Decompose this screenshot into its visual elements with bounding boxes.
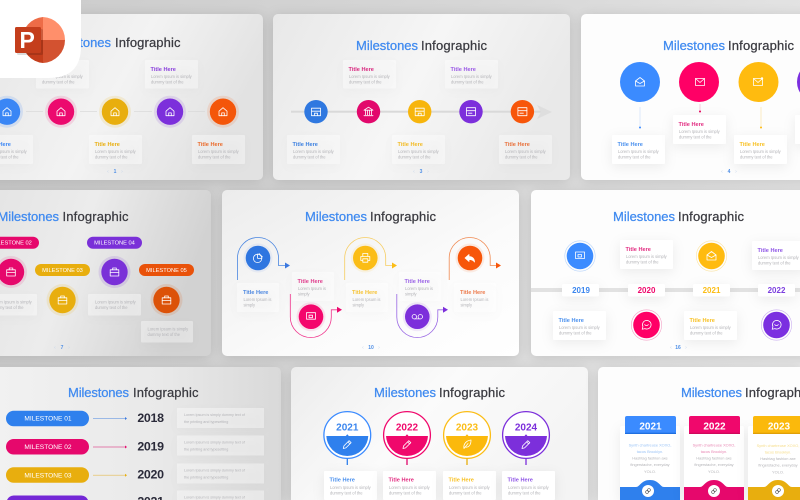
card purple: dummy text of the <box>151 80 184 84</box>
card orange: Title Here <box>198 142 223 148</box>
column 2021: fingerstache, everyday <box>630 462 670 467</box>
heading: milestone rows: Milestones <box>68 385 130 400</box>
node yellow <box>46 284 78 316</box>
milestone circle orange <box>207 96 239 128</box>
card pink: Title Here <box>626 247 651 253</box>
page number: ‹ <box>670 345 672 351</box>
year 2022: 2022 <box>768 286 786 295</box>
year 2020 <box>628 284 665 296</box>
curved arrow blue <box>238 237 290 280</box>
curved arrow yellow <box>345 237 397 280</box>
card blue: dummy text of the <box>293 154 326 160</box>
card yellow: Title Here <box>740 142 765 148</box>
column 2021: Synth chartreuse XOXO, <box>629 442 671 448</box>
card pink: Title Here <box>298 279 323 285</box>
gauge 2024 <box>503 412 549 465</box>
curved arrow orange <box>449 237 501 280</box>
pill milestone 03: MILESTONE 03 <box>42 268 83 274</box>
card purple: Title Here <box>508 478 533 484</box>
column 2023: fingerstache, everyday <box>758 462 798 468</box>
page number: ‹ <box>721 169 723 175</box>
milestone circle blue <box>0 96 23 128</box>
gauge 2024: 2024 <box>515 422 538 434</box>
text block right: dummy text of the <box>148 332 181 337</box>
card pink <box>620 240 673 269</box>
row 2019: Lorem Ipsum is simply dummy text of <box>184 440 246 444</box>
pill milestone 02 <box>0 237 39 249</box>
column 2021: 2021 <box>639 422 662 432</box>
column 2021: YOLO. <box>644 469 656 474</box>
row 2020: the printing and typesetting <box>184 476 228 480</box>
card yellow: Title Here <box>94 142 120 148</box>
node blue <box>244 244 272 272</box>
year 2020: 2020 <box>638 286 656 295</box>
row 2018 <box>6 408 264 428</box>
panel: year columns <box>598 367 800 500</box>
card purple: Title Here <box>450 67 476 73</box>
text block right: Lorem Ipsum is simply <box>148 326 189 332</box>
gauge 2022 <box>384 412 430 465</box>
card pink: Lorem Ipsum is simply <box>349 74 391 79</box>
card pink: Lorem Ipsum is simply <box>679 129 721 134</box>
node pink <box>0 256 27 288</box>
card blue: dummy text of the <box>330 490 363 496</box>
panel: slide 3 line timeline <box>273 14 570 180</box>
pill milestone 04 <box>87 237 142 249</box>
card yellow <box>346 283 388 312</box>
card yellow: Title Here <box>690 318 715 324</box>
card pink: Title Here <box>42 67 67 73</box>
card pink: Lorem Ipsum is simply <box>42 74 84 79</box>
node yellow <box>696 241 727 271</box>
year 2019: 2019 <box>572 286 590 295</box>
card blue <box>287 135 340 164</box>
card pink: simply <box>298 292 311 296</box>
row 2018: the printing and typesetting <box>184 420 228 424</box>
text block left <box>0 294 37 316</box>
heading: slide 3: Milestones <box>356 38 418 53</box>
card pink: dummy text of the <box>389 490 422 496</box>
milestone circle yellow <box>99 96 131 128</box>
column 2021: tacos Brooklyn. <box>637 449 663 454</box>
card yellow: dummy text of the <box>690 330 723 336</box>
heading: milestone rows: Infographic <box>133 385 199 400</box>
gauge 2023: 2023 <box>456 422 479 434</box>
card purple: Lorem Ipsum is <box>405 286 433 291</box>
row 2020 <box>6 464 264 484</box>
page number: ‹ <box>107 169 109 175</box>
page number <box>413 169 429 175</box>
page number: 7 <box>61 345 64 351</box>
card blue: Lorem Ipsum is simply <box>293 149 335 154</box>
card blue: dummy text of the <box>618 154 651 160</box>
heading: year gauges: Milestones <box>374 385 436 400</box>
row 2018: Lorem Ipsum is simply dummy text of <box>184 413 246 417</box>
page number <box>362 345 380 351</box>
year 2019 <box>562 284 599 296</box>
column 2023: Synth chartreuse XOXO, <box>757 443 799 448</box>
card blue <box>324 471 377 500</box>
column 2022: YOLO. <box>708 469 720 474</box>
card blue <box>612 135 665 164</box>
panel: slide 16 year timeline <box>531 190 800 356</box>
card purple <box>445 60 498 88</box>
card yellow: Lorem Ipsum is <box>352 297 380 302</box>
heading: slide 1: Infographic <box>115 35 181 50</box>
card pink: Title Here <box>678 122 704 128</box>
card pink <box>343 60 396 88</box>
card purple: dummy text of the <box>451 80 484 84</box>
PowerPoint logo panel <box>0 0 81 78</box>
row 2019: 2019 <box>137 440 164 454</box>
card purple: dummy text of the <box>758 260 791 266</box>
card purple <box>145 60 198 88</box>
card orange: Title Here <box>460 290 485 296</box>
node blue <box>304 100 328 123</box>
card blue <box>553 311 606 340</box>
year 2021 <box>693 284 730 296</box>
card orange: Lorem Ipsum is simply <box>505 149 547 154</box>
card pink: Lorem Ipsum is simply <box>626 254 668 259</box>
connector lines <box>26 111 205 113</box>
heading: year columns: Milestones <box>681 385 742 400</box>
page number: 10 <box>368 345 374 351</box>
pill milestone 04: MILESTONE 04 <box>94 241 135 247</box>
card blue: Title Here <box>558 318 584 324</box>
year 2022 <box>758 284 795 296</box>
card blue: Title Here <box>292 142 318 148</box>
card blue: Lorem Ipsum is <box>244 297 271 302</box>
row 2021: Lorem Ipsum is simply dummy text of <box>184 496 246 500</box>
heading: slide 10: Milestones <box>305 209 368 224</box>
panel: milestone rows <box>0 367 281 500</box>
column 2022: Hashtag fashion axe <box>696 456 732 460</box>
page number: 4 <box>728 169 731 175</box>
card yellow: Lorem Ipsum is simply <box>95 149 137 154</box>
card pink <box>673 115 726 144</box>
pill milestone 03 <box>35 264 90 276</box>
card purple <box>399 272 441 301</box>
card orange: Lorem Ipsum is simply <box>198 149 240 154</box>
card purple: dummy text of the <box>508 490 541 496</box>
panel: slide 4 large circles <box>581 14 800 180</box>
row 2019: the printing and typesetting <box>184 448 228 452</box>
card yellow <box>734 135 787 164</box>
card yellow <box>392 135 445 164</box>
card purple edge <box>795 115 800 144</box>
timeline bar <box>531 288 800 292</box>
heading: slide 16: Infographic <box>678 209 744 224</box>
text block right <box>141 321 193 342</box>
column 2023: 2023 <box>768 422 791 432</box>
card yellow: Title Here <box>448 478 474 484</box>
card pink: dummy text of the <box>42 80 75 84</box>
node orange <box>456 244 484 272</box>
heading: slide 3: Infographic <box>421 38 488 53</box>
pill milestone 05: MILESTONE 05 <box>146 268 187 274</box>
node purple <box>98 256 130 288</box>
gauge 2022: 2022 <box>396 422 419 434</box>
card pink: dummy text of the <box>626 260 659 264</box>
card orange: Title Here <box>504 142 530 148</box>
card orange: dummy text of the <box>505 154 538 160</box>
text block middle: dummy text of the <box>95 305 128 310</box>
gauge 2023 <box>444 412 490 465</box>
card yellow: Lorem Ipsum is simply <box>740 149 782 154</box>
node orange <box>150 284 182 316</box>
curved arrow purple <box>397 294 448 337</box>
column 2022: fingerstache, everyday <box>694 462 734 467</box>
year 2021: 2021 <box>703 286 721 295</box>
card purple <box>752 241 800 270</box>
card pink: dummy text of the <box>679 134 712 140</box>
row 2019 <box>6 436 264 456</box>
card blue: Lorem Ipsum is simply <box>618 149 660 154</box>
card purple <box>502 471 555 500</box>
card pink: Title Here <box>388 478 414 484</box>
gauge 2021 <box>324 412 371 465</box>
card blue: Title Here <box>243 290 268 296</box>
page number: › <box>685 345 687 351</box>
icon: PowerPoint logo: P <box>20 27 35 53</box>
card blue: Lorem Ipsum is simply <box>330 485 372 490</box>
page number: › <box>121 169 123 175</box>
node pink with stem <box>679 62 719 112</box>
card purple: Title Here <box>404 279 430 285</box>
column 2022: tacos Brooklyn. <box>701 449 727 454</box>
card yellow: Lorem Ipsum is simply <box>690 325 732 330</box>
node pink <box>296 302 326 331</box>
column 2022: Synth chartreuse XOXO, <box>693 442 735 448</box>
page number: › <box>68 345 70 351</box>
card yellow: Lorem Ipsum is simply <box>449 485 491 490</box>
card pink: dummy text of the <box>349 80 382 84</box>
card yellow: dummy text of the <box>398 154 431 160</box>
page number: ‹ <box>413 169 415 175</box>
heading: slide 16: Milestones <box>613 209 676 224</box>
card orange <box>499 135 552 164</box>
heading: slide 10: Infographic <box>370 209 436 224</box>
page number: ‹ <box>362 345 364 351</box>
node purple <box>797 62 800 102</box>
card yellow: simply <box>352 302 365 308</box>
card purple: Lorem Ipsum is simply <box>451 74 493 79</box>
row 2018: MILESTONE 01 <box>24 416 72 423</box>
column 2023 <box>748 416 800 500</box>
card yellow <box>684 311 737 340</box>
panel: slide 1 circles timeline <box>0 14 263 180</box>
node purple <box>459 100 483 123</box>
node purple <box>403 302 432 331</box>
column 2021: Hashtag fashion axe <box>632 456 668 460</box>
card blue <box>0 135 33 164</box>
node pink <box>357 100 380 123</box>
pill milestone 05 <box>139 264 194 276</box>
column 2023: Hashtag fashion axe <box>760 456 796 461</box>
heading: slide 7: Infographic <box>62 209 129 224</box>
column 2022: 2022 <box>703 422 726 432</box>
card yellow <box>89 135 142 164</box>
card yellow: dummy text of the <box>740 154 773 160</box>
row 2019: MILESTONE 02 <box>24 444 72 451</box>
card blue: dummy text of the <box>559 330 592 336</box>
page number <box>107 169 123 175</box>
card blue: simply <box>244 302 256 308</box>
text block middle <box>88 294 141 316</box>
curved arrow pink <box>290 294 342 337</box>
card pink <box>292 272 334 301</box>
panel: slide 10 curved arrows <box>222 190 519 356</box>
column 2021 <box>620 416 680 500</box>
node blue with stem <box>620 62 660 128</box>
node purple <box>761 310 792 340</box>
page number: › <box>378 345 380 351</box>
heading: slide 1: Milestones <box>49 35 112 50</box>
node yellow with stem <box>738 62 778 128</box>
gauge 2021: 2021 <box>336 422 359 434</box>
heading: slide 4: Infographic <box>728 38 794 53</box>
card yellow: dummy text of the <box>449 490 482 496</box>
node yellow <box>408 100 431 123</box>
text block middle: Lorem Ipsum is simply <box>95 300 137 304</box>
card orange <box>454 283 496 312</box>
card orange <box>192 135 245 164</box>
card pink: Title Here <box>348 67 374 73</box>
card pink <box>383 471 436 500</box>
card orange: simply <box>460 302 473 308</box>
card purple: Title Here <box>758 248 783 254</box>
milestone circle purple <box>154 96 186 128</box>
card yellow: Title Here <box>352 290 377 296</box>
card purple: Lorem Ipsum is simply <box>151 74 193 79</box>
page number: 16 <box>675 345 681 351</box>
card yellow: Title Here <box>398 142 423 148</box>
node pink <box>631 310 662 340</box>
panel: year gauges <box>291 367 588 500</box>
card purple: Title Here <box>150 67 176 73</box>
card blue: Lorem Ipsum is simply <box>559 325 601 330</box>
card purple: Lorem Ipsum is simply <box>508 485 550 490</box>
column 2023: YOLO. <box>772 470 784 474</box>
row 2020: 2020 <box>137 468 164 482</box>
heading: slide 4: Milestones <box>663 38 726 53</box>
milestone circle pink <box>45 96 77 128</box>
column 2023: tacos Brooklyn. <box>765 450 791 454</box>
page number <box>721 169 737 175</box>
card blue: Title Here <box>618 142 643 148</box>
row 2020: Lorem Ipsum is simply dummy text of <box>184 468 246 472</box>
heading: year gauges: Infographic <box>439 385 506 400</box>
row 2020: MILESTONE 03 <box>24 472 72 480</box>
card yellow: dummy text of the <box>95 154 128 160</box>
row 2018: 2018 <box>137 411 164 425</box>
card pink <box>36 60 89 88</box>
card pink: Lorem Ipsum is simply <box>389 485 431 490</box>
card yellow <box>443 471 496 500</box>
node blue <box>565 241 595 271</box>
card blue <box>237 283 279 312</box>
timeline arrow <box>291 105 552 119</box>
page number: › <box>427 169 429 175</box>
card pink: Lorem Ipsum is <box>298 286 326 291</box>
card orange: dummy text of the <box>198 154 231 160</box>
node orange <box>511 100 534 123</box>
panel: slide 7 milestone pills <box>0 190 211 356</box>
page number <box>670 345 687 351</box>
card blue: Title Here <box>330 478 355 484</box>
page number: 1 <box>114 169 117 175</box>
page number <box>54 345 70 351</box>
card yellow: Lorem Ipsum is simply <box>398 149 440 154</box>
page number: ‹ <box>54 345 56 351</box>
node yellow <box>351 244 380 272</box>
card orange: Lorem Ipsum is <box>460 297 488 302</box>
page number: 3 <box>420 169 423 175</box>
card purple: simply <box>405 292 418 296</box>
column 2022 <box>684 416 744 500</box>
card purple: Lorem Ipsum is simply <box>758 255 800 260</box>
row 2021 <box>7 490 264 500</box>
page number: › <box>735 169 737 175</box>
